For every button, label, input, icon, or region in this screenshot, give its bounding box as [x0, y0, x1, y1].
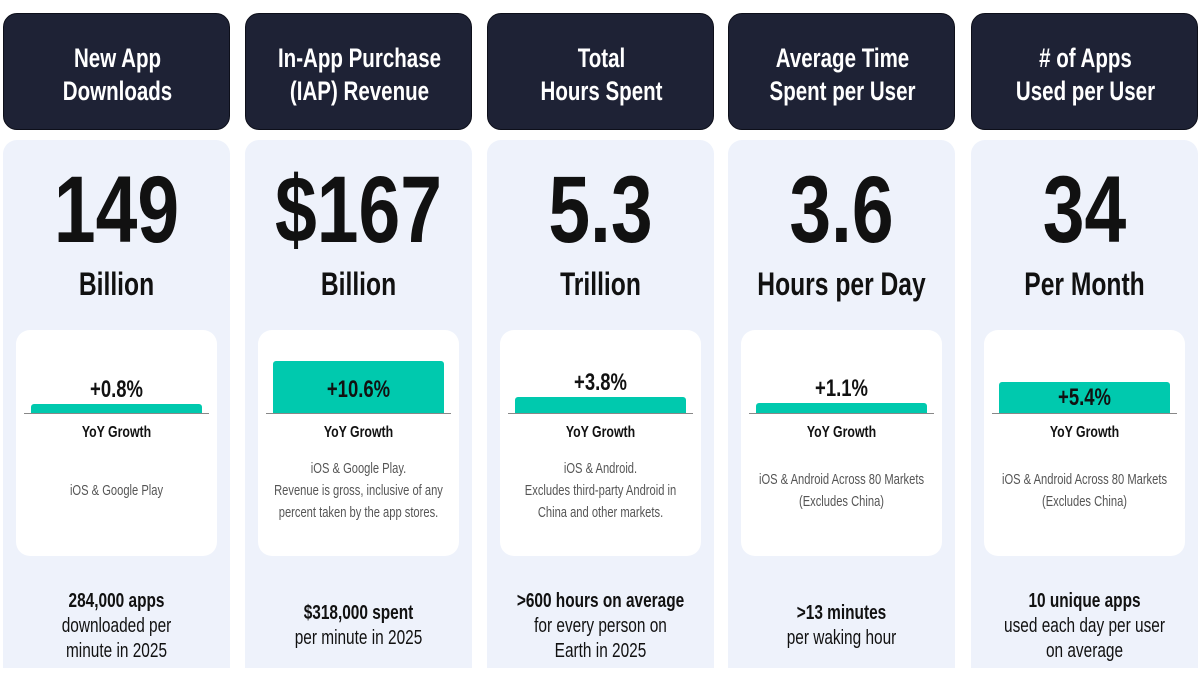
- bottom stat: 284,000 apps: [69, 590, 164, 612]
- growth value: +5.4%: [1058, 384, 1111, 411]
- header: Average Time: [776, 43, 909, 73]
- note: iOS & Google Play: [70, 483, 163, 499]
- unit: Per Month: [1024, 266, 1145, 302]
- growth bar: [515, 397, 686, 413]
- bottom stat: used each day per user: [1004, 615, 1165, 637]
- header: [971, 13, 1198, 130]
- header: New App: [74, 43, 161, 73]
- unit: Trillion: [560, 266, 641, 302]
- note: iOS & Google Play.: [311, 461, 406, 477]
- bottom stat: [62, 590, 171, 662]
- yoy label: YoY Growth: [807, 424, 876, 441]
- note: (Excludes China): [1042, 494, 1127, 510]
- bottom stat: Earth in 2025: [555, 640, 646, 662]
- big number: 34: [1043, 157, 1126, 263]
- note: iOS & Android Across 80 Markets: [1002, 472, 1167, 488]
- growth bar: [31, 404, 202, 413]
- growth card: [500, 330, 701, 556]
- header: Hours Spent: [540, 76, 662, 106]
- bottom stat: on average: [1046, 640, 1123, 662]
- growth bar: [999, 382, 1170, 413]
- growth card: [741, 330, 942, 556]
- yoy label: YoY Growth: [324, 424, 393, 441]
- note: iOS & Android.: [564, 461, 637, 477]
- header: # of Apps: [1039, 43, 1132, 73]
- note: (Excludes China): [799, 494, 884, 510]
- bottom stat: [787, 602, 896, 649]
- header: [728, 13, 955, 130]
- big number: 3.6: [789, 157, 894, 263]
- note: iOS & Android Across 80 Markets: [759, 472, 924, 488]
- bottom stat: $318,000 spent: [304, 602, 413, 624]
- unit: Hours per Day: [757, 266, 926, 302]
- note: China and other markets.: [538, 505, 663, 521]
- big number: 149: [54, 157, 179, 263]
- bottom stat: >600 hours on average: [517, 590, 684, 612]
- note: [1002, 472, 1167, 510]
- unit: Billion: [321, 266, 396, 302]
- column: total hours: [487, 13, 714, 668]
- bottom stat: for every person on: [534, 615, 667, 637]
- bottom stat: per waking hour: [787, 627, 896, 649]
- header: Used per User: [1016, 76, 1155, 106]
- header: Spent per User: [770, 76, 915, 106]
- bottom stat: [295, 602, 422, 649]
- growth card: [16, 330, 217, 556]
- growth value: +1.1%: [815, 375, 868, 402]
- note: Excludes third-party Android in: [525, 483, 676, 499]
- yoy label: YoY Growth: [566, 424, 635, 441]
- unit: Billion: [79, 266, 154, 302]
- bottom stat: [517, 590, 684, 662]
- column: new app downloads: [3, 13, 230, 668]
- header: Total: [578, 43, 625, 73]
- panel: [487, 140, 714, 668]
- header: [245, 13, 472, 130]
- bottom stat: minute in 2025: [66, 640, 167, 662]
- bottom stat: [1004, 590, 1165, 662]
- big number: $167: [275, 157, 442, 263]
- note: Revenue is gross, inclusive of any: [274, 483, 443, 499]
- header: [3, 13, 230, 130]
- note: [759, 472, 924, 510]
- growth value: +10.6%: [327, 376, 390, 403]
- yoy label: YoY Growth: [82, 424, 151, 441]
- header: (IAP) Revenue: [290, 76, 429, 106]
- bottom stat: >13 minutes: [797, 602, 886, 624]
- growth card: [258, 330, 459, 556]
- header: [487, 13, 714, 130]
- growth bar: [273, 361, 444, 413]
- growth value: +3.8%: [574, 369, 627, 396]
- note: [525, 461, 676, 521]
- header: Downloads: [63, 76, 172, 106]
- growth bar: [756, 403, 927, 413]
- growth card: [984, 330, 1185, 556]
- big number: 5.3: [548, 157, 653, 263]
- bottom stat: 10 unique apps: [1028, 590, 1141, 612]
- header: In-App Purchase: [278, 43, 441, 73]
- panel: [3, 140, 230, 668]
- growth value: +0.8%: [90, 376, 143, 403]
- bottom stat: per minute in 2025: [295, 627, 422, 649]
- note: [274, 461, 443, 521]
- yoy label: YoY Growth: [1050, 424, 1119, 441]
- panel: [245, 140, 472, 668]
- column: apps per user: [971, 13, 1198, 668]
- bottom stat: downloaded per: [62, 615, 171, 637]
- panel: [971, 140, 1198, 668]
- column: IAP revenue: [245, 13, 472, 668]
- column: avg time per user: [728, 13, 955, 668]
- note: percent taken by the app stores.: [279, 505, 438, 521]
- panel: [728, 140, 955, 668]
